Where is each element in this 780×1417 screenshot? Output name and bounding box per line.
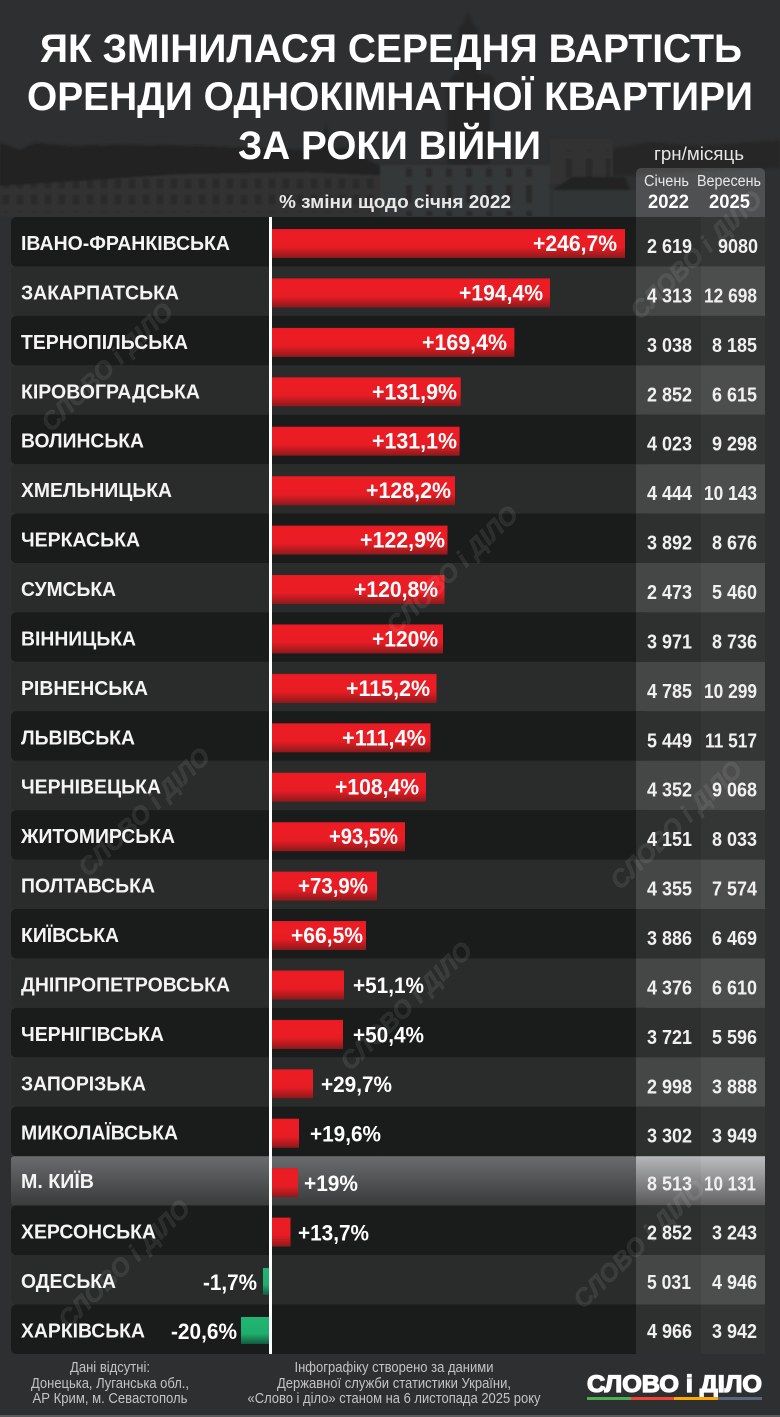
row: Рівненська [11,662,765,711]
watermarks: СЛОВО і ДІЛО [335,936,478,1076]
row: Закарпатська [11,266,765,316]
watermarks: СЛОВО і ДІЛО [73,742,216,882]
row: Одеська [11,1255,765,1304]
row: Волинська: 4 023 [647,434,692,456]
row: Дніпропетровська: +51,1% [353,973,424,998]
column header [636,168,765,217]
footnote: missing data: АР Крим, м. Севастополь [32,1390,188,1407]
row: Полтавська: 4 355 [647,879,692,901]
row: Кіровоградська [11,365,765,415]
row: Сумська: +120,8% [354,577,438,602]
row: Житомирська [11,810,765,860]
row: Полтавська: +73,9% [298,874,368,899]
row: Черкаська: +122,9% [360,528,445,553]
row: Хмельницька [11,464,765,514]
row: Закарпатська: 12 698 [704,285,757,307]
row: Житомирська: 8 033 [712,829,757,851]
row: Вінницька: ВІННИЦЬКА [21,627,136,650]
row: Волинська [11,415,765,464]
row: Харківська: -20,6% [171,1319,237,1344]
row: Тернопільська: ТЕРНОПІЛЬСЬКА [21,331,188,354]
row: Кіровоградська: 2 852 [647,384,692,406]
row: Рівненська: РІВНЕНСЬКА [21,677,148,700]
footnote: missing data [31,1359,189,1407]
row: Закарпатська: 4 313 [647,285,692,307]
row: Дніпропетровська: ДНІПРОПЕТРОВСЬКА [21,974,230,996]
row: Одеська: ОДЕСЬКА [21,1270,116,1293]
row: Тернопільська: +169,4% [422,330,507,355]
watermarks: СЛОВО і ДІЛО [381,500,524,640]
background photo: city skyline [0,12,780,217]
row: Хмельницька: 10 143 [704,483,757,505]
row: Миколаївська: +19,6% [310,1122,381,1147]
row: Полтавська: ПОЛТАВСЬКА [21,875,155,898]
row: Львівська [11,711,765,761]
row: Тернопільська: 3 038 [647,335,692,357]
column header: Вересень [697,173,761,190]
logo: Слово і діло: СЛОВО і ДІЛО [587,1371,762,1398]
row: м. Київ (highlighted): +19% [304,1171,358,1196]
watermarks [36,185,768,1334]
row: Сумська: 2 473 [647,582,692,604]
footnote: data source: Державної служби статистики України, [277,1375,511,1392]
title: ЯК ЗМІНИЛАСЯ СЕРЕДНЯ ВАРТІСТЬ [40,27,742,71]
row: Миколаївська: МИКОЛАЇВСЬКА [21,1122,178,1145]
row: Волинська: +131,1% [372,429,457,454]
row: Львівська: +111,4% [342,725,426,750]
bottom edge [0,1415,780,1417]
row: Івано-Франківська [11,217,765,266]
row: Одеська: 4 946 [712,1272,757,1294]
row: Херсонська [11,1206,765,1255]
watermarks: СЛОВО і ДІЛО [625,185,768,325]
row: Закарпатська: ЗАКАРПАТСЬКА [21,281,179,304]
row: Рівненська: 10 299 [704,681,757,703]
row: Рівненська: +115,2% [346,676,430,701]
row: Вінницька [11,612,765,662]
row: Рівненська: 4 785 [647,681,692,703]
row: Полтавська: 7 574 [712,879,758,901]
row: Полтавська [11,860,765,909]
title [27,27,753,168]
row: Херсонська: ХЕРСОНСЬКА [21,1221,156,1244]
row: Львівська: ЛЬВІВСЬКА [21,726,135,749]
row: Херсонська: +13,7% [298,1221,369,1246]
row: Харківська: 4 966 [647,1321,692,1343]
row: Миколаївська: 3 302 [647,1126,692,1148]
row: Сумська [11,563,765,612]
row: Херсонська: 2 852 [647,1223,692,1245]
row: Вінницька: 3 971 [647,631,692,653]
row: Івано-Франківська: ІВАНО-ФРАНКІВСЬКА [21,232,230,255]
footnote: data source [248,1359,541,1407]
row: Черкаська: 3 892 [647,533,692,555]
row: Тернопільська: 8 185 [712,335,757,357]
footnote: data source: Інфографіку створено за даними [294,1359,494,1376]
row: Запорізька: ЗАПОРІЗЬКА [21,1072,146,1095]
row: м. Київ (highlighted): М. КИЇВ [21,1170,94,1193]
row: Івано-Франківська: 2 619 [647,236,692,258]
row: Чернівецька: ЧЕРНІВЕЦЬКА [21,776,161,799]
row: Чернівецька: 9 068 [712,780,757,802]
watermarks: СЛОВО і ДІЛО [36,297,179,437]
row: Дніпропетровська: 4 376 [647,978,692,1000]
watermarks: СЛОВО і ДІЛО [53,1194,196,1334]
row: Львівська: 5 449 [647,730,692,752]
row: Черкаська [11,514,765,563]
row: Кіровоградська: КІРОВОГРАДСЬКА [21,381,200,404]
row: Вінницька: 8 736 [712,631,757,653]
axis caption: % зміни щодо січня 2022 [279,192,511,212]
row: Сумська: 5 460 [712,582,757,604]
row: Харківська: 3 942 [712,1321,757,1343]
row: Житомирська: +93,5% [329,824,398,849]
row: Черкаська: ЧЕРКАСЬКА [21,529,140,552]
footnote: missing data: Донецька, Луганська обл., [31,1375,189,1392]
row: Хмельницька: 4 444 [647,483,693,505]
title: ЗА РОКИ ВІЙНИ [238,122,541,168]
row: Київська [11,909,765,958]
row: Миколаївська [11,1107,765,1156]
row: Херсонська: 3 243 [712,1223,757,1245]
row: Івано-Франківська: 9080 [718,236,758,258]
unit label: грн/місяць [654,144,744,164]
watermarks: СЛОВО і ДІЛО [605,755,748,895]
row: Чернігівська: ЧЕРНІГІВСЬКА [21,1023,164,1046]
column header: Січень [644,173,689,190]
row: Запорізька: +29,7% [321,1072,392,1097]
row: Тернопільська [11,316,765,365]
title: ОРЕНДИ ОДНОКІМНАТНОЇ КВАРТИРИ [27,75,753,119]
row: Запорізька: 2 998 [647,1076,692,1098]
row: Волинська: ВОЛИНСЬКА [21,430,144,453]
row: Кіровоградська: 6 615 [712,384,757,406]
row: м. Київ (highlighted) [11,1156,765,1205]
row: Запорізька [11,1057,765,1107]
row: Житомирська: ЖИТОМИРСЬКА [20,825,175,848]
row: Миколаївська: 3 949 [712,1126,757,1148]
row: Чернігівська: +50,4% [353,1022,424,1048]
row: Одеська: 5 031 [647,1272,691,1294]
row: Івано-Франківська: +246,7% [533,231,617,256]
column header: 2022 [648,191,689,213]
footnote: data source: «Слово і діло» станом на 6 листопада 2025 року [248,1390,541,1407]
row: Хмельницька: +128,2% [366,478,451,503]
row: Чернівецька: +108,4% [335,775,419,800]
row: м. Київ (highlighted): 8 513 [647,1174,692,1196]
row: Запорізька: 3 888 [712,1076,757,1098]
row: Чернівецька [11,761,765,810]
row: Чернігівська [11,1008,765,1057]
watermarks: СЛОВО і ДІЛО [568,1174,711,1314]
row: Київська: КИЇВСЬКА [21,924,119,947]
row: Чернівецька: 4 352 [647,780,692,802]
row: Київська: +66,5% [291,923,363,948]
row: Дніпропетровська: 6 610 [712,978,757,1000]
row: Хмельницька: ХМЕЛЬНИЦЬКА [21,479,172,502]
row: Закарпатська: +194,4% [459,280,543,305]
row: м. Київ (highlighted): 10 131 [704,1174,756,1196]
row: Дніпропетровська [11,958,765,1008]
row: Харківська [11,1304,765,1354]
footnote: missing data: Дані відсутні: [70,1359,150,1376]
row: Харківська: ХАРКІВСЬКА [21,1320,145,1342]
row: Львівська: 11 517 [705,730,757,752]
row: Київська: 3 886 [647,928,692,950]
zero axis line [269,217,272,1354]
row: Чернігівська: 5 596 [712,1027,757,1049]
row: Чернігівська: 3 721 [647,1027,692,1049]
row: Київська: 6 469 [712,928,757,950]
row: Вінницька: +120% [372,626,438,651]
row: Житомирська: 4 151 [647,829,692,851]
row: Сумська: СУМСЬКА [21,578,116,601]
row: Волинська: 9 298 [712,434,757,456]
row: Черкаська: 8 676 [712,533,757,555]
column header: 2025 [709,191,750,213]
row: Одеська: -1,7% [203,1270,257,1295]
row: Кіровоградська: +131,9% [372,379,457,404]
